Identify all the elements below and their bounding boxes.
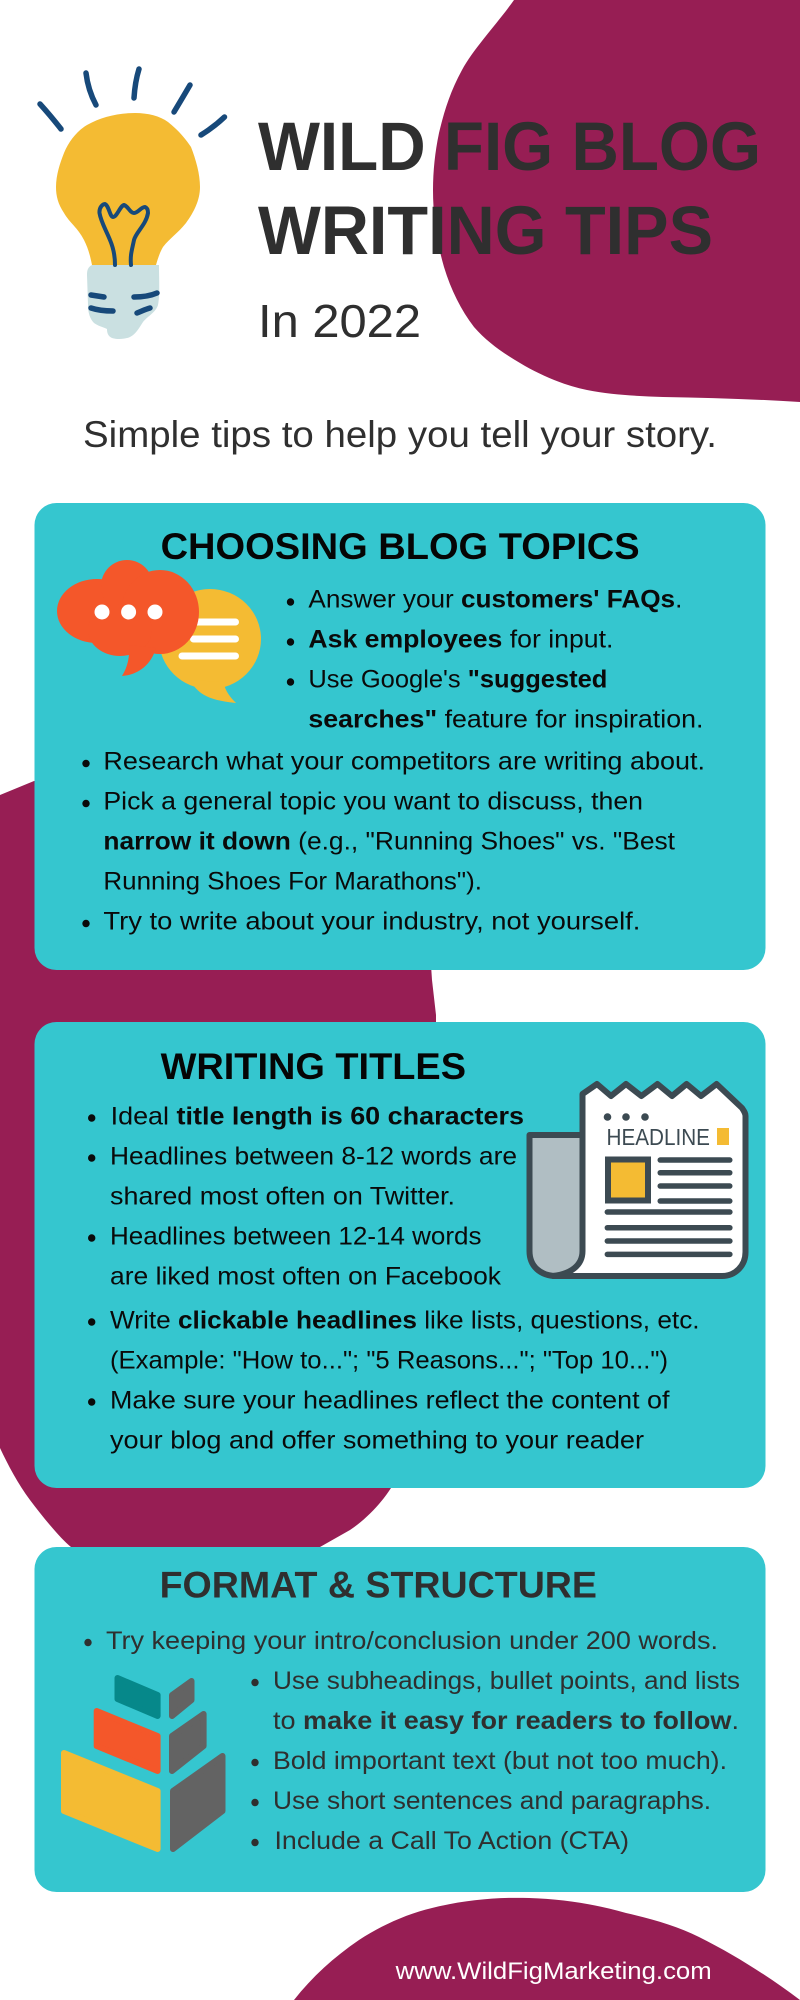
bullet list: writing titles: (Example: "How to..."; "5 Reasons..."; "Top 10...")	[110, 1346, 668, 1374]
icon: layered wheat	[64, 1678, 222, 1849]
title	[258, 108, 761, 269]
bullet list: choosing blog topics	[82, 585, 705, 935]
bullet list: choosing blog topics: searches" feature for inspiration.	[308, 705, 703, 733]
bullet list: choosing blog topics: Use Google's "suggested	[308, 665, 607, 693]
bullet list: choosing blog topics: Pick a general topic you want to discuss, then	[103, 787, 643, 815]
background blob: bottom right	[294, 1898, 800, 2000]
bullet list: format and structure: Try keeping your intro/conclusion under 200 words.	[106, 1627, 718, 1655]
panel: writing titles	[34, 1022, 766, 1488]
bullet list: writing titles: Ideal title length is 60 characters	[111, 1102, 524, 1130]
heading: writing titles: WRITING TITLES	[161, 1046, 466, 1087]
background blob: top right	[433, 0, 800, 402]
bullet list: writing titles: are liked most often on Facebook	[110, 1262, 502, 1290]
bullet list: writing titles: Write clickable headlines like lists, questions, etc.	[110, 1306, 700, 1334]
icon: light bulb	[40, 69, 224, 339]
bullet list: writing titles: your blog and offer something to your reader	[110, 1426, 644, 1454]
bullet list: choosing blog topics: Answer your customers' FAQs .	[308, 585, 682, 613]
bullet list: writing titles	[88, 1102, 700, 1454]
bullet list: choosing blog topics: Ask employees for input.	[308, 625, 613, 653]
icon: newspaper: HEADLINE	[606, 1124, 710, 1150]
title: WILD FIG BLOG	[258, 108, 761, 185]
bullet list: format and structure: Include a Call To Action (CTA)	[274, 1827, 629, 1855]
bullet list: format and structure: Use subheadings, bullet points, and lists	[273, 1667, 740, 1695]
heading: choosing blog topics: CHOOSING BLOG TOPICS	[161, 526, 640, 567]
bullet list: format and structure: Use short sentences and paragraphs.	[273, 1787, 711, 1815]
icon: newspaper	[530, 1084, 746, 1276]
panel: choosing blog topics	[34, 503, 766, 970]
bullet list: format and structure: to make it easy for readers to follow .	[273, 1707, 739, 1735]
bullet list: choosing blog topics: Try to write about your industry, not yourself.	[103, 907, 640, 935]
title: WRITING TIPS	[258, 192, 713, 269]
subtitle: In 2022	[258, 295, 421, 347]
bullet list: format and structure: Bold important text (but not too much).	[273, 1747, 727, 1775]
bullet list: writing titles: Headlines between 12-14 words	[110, 1222, 482, 1250]
bullet list: writing titles: Headlines between 8-12 words are	[110, 1142, 517, 1170]
panel: format and structure	[34, 1547, 766, 1892]
bullet list: writing titles: shared most often on Twitter.	[110, 1182, 455, 1210]
background blob: middle left	[0, 770, 436, 1570]
bullet list: choosing blog topics: Running Shoes For Marathons").	[103, 867, 482, 895]
bullet list: format and structure	[84, 1627, 740, 1855]
bullet list: choosing blog topics: narrow it down (e.g., "Running Shoes" vs. "Best	[103, 827, 675, 855]
icon: speech bubbles	[57, 560, 261, 703]
footer url: www.WildFigMarketing.com	[395, 1958, 712, 1985]
bullet list: writing titles: Make sure your headlines reflect the content of	[110, 1386, 670, 1414]
tagline: Simple tips to help you tell your story.	[83, 414, 717, 455]
heading: format and structure: FORMAT & STRUCTURE	[160, 1565, 597, 1606]
bullet list: choosing blog topics: Research what your competitors are writing about.	[103, 747, 705, 775]
